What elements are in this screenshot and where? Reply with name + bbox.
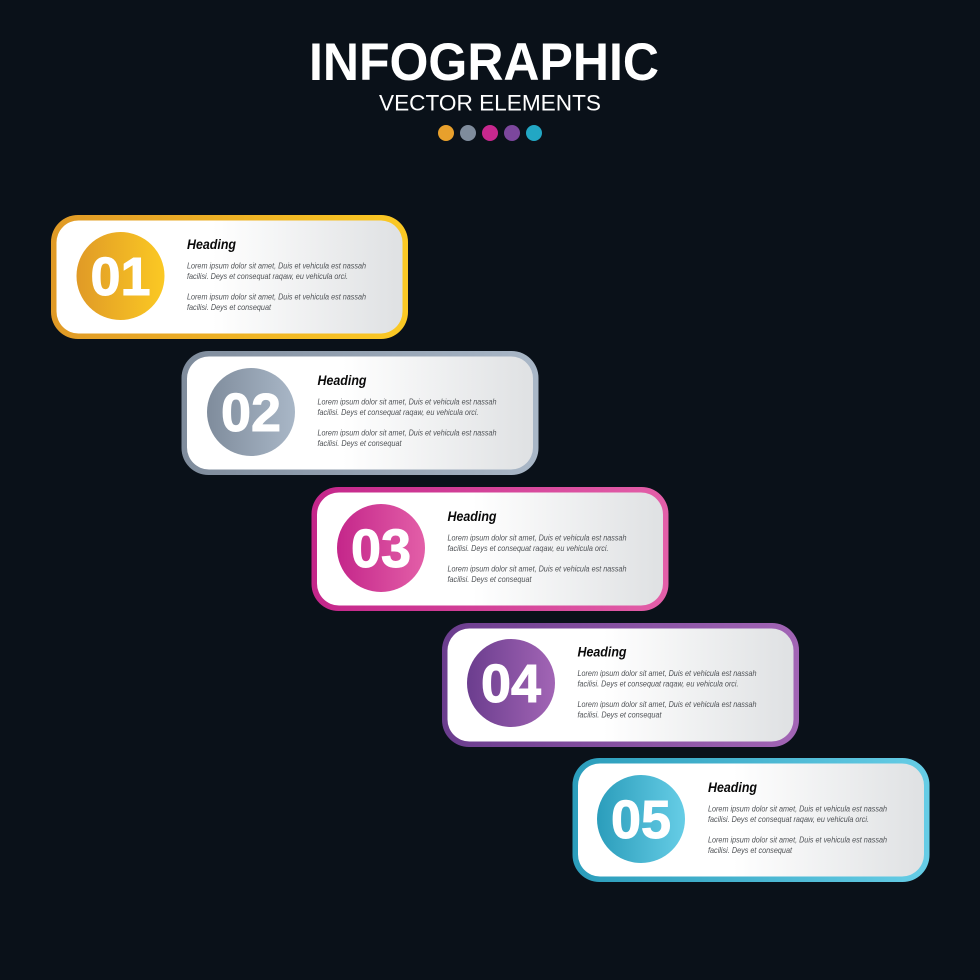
- body text 05: facilisi. Deys et consequat: [708, 846, 793, 855]
- panel: step 03: [312, 487, 668, 611]
- number badge 01: 01: [90, 247, 151, 307]
- body text 03: Lorem ipsum dolor sit amet, Duis et vehicula est nassah: [448, 564, 627, 573]
- number badge 03: [337, 504, 425, 592]
- body text 02: Lorem ipsum dolor sit amet, Duis et vehicula est nassah: [318, 428, 497, 437]
- body text 05: [708, 804, 887, 855]
- number badge 01: [76, 232, 164, 320]
- title: INFOGRAPHIC: [309, 33, 659, 92]
- body text 04: Lorem ipsum dolor sit amet, Duis et vehicula est nassah: [578, 669, 757, 678]
- colour dots: [438, 125, 542, 141]
- body text 03: facilisi. Deys et consequat raqaw, eu vehicula orci.: [448, 544, 608, 553]
- body text 04: [578, 669, 757, 720]
- heading 05: Heading: [708, 779, 757, 795]
- body text 03: Lorem ipsum dolor sit amet, Duis et vehicula est nassah: [448, 534, 627, 542]
- body text 05: facilisi. Deys et consequat raqaw, eu vehicula orci.: [708, 815, 869, 824]
- heading 01: Heading: [187, 236, 236, 252]
- panel: step 02: [182, 351, 538, 475]
- body text 01: Lorem ipsum dolor sit amet, Duis et vehicula est nassah: [187, 292, 366, 301]
- number badge 05: [597, 775, 685, 863]
- number badge 02: [207, 368, 295, 456]
- body text 02: Lorem ipsum dolor sit amet, Duis et vehicula est nassah: [318, 398, 497, 406]
- body text 05: Lorem ipsum dolor sit amet, Duis et vehicula est nassah: [708, 835, 887, 844]
- panel: step 01: [51, 215, 408, 339]
- number badge 02: 02: [221, 383, 281, 443]
- number badge 03: 03: [351, 519, 411, 579]
- body text 02: facilisi. Deys et consequat raqaw, eu vehicula orci.: [318, 408, 478, 417]
- body text 01: facilisi. Deys et consequat: [187, 303, 272, 312]
- body text 01: Lorem ipsum dolor sit amet, Duis et vehicula est nassah: [187, 262, 366, 270]
- body text 04: facilisi. Deys et consequat raqaw, eu vehicula orci.: [578, 680, 738, 688]
- body text 04: Lorem ipsum dolor sit amet, Duis et vehicula est nassah: [578, 700, 757, 709]
- subtitle: VECTOR ELEMENTS: [379, 90, 601, 116]
- panel: step 04: [442, 623, 799, 747]
- heading 04: Heading: [578, 644, 627, 660]
- number badge 04: 04: [481, 654, 541, 714]
- body text 05: Lorem ipsum dolor sit amet, Duis et vehicula est nassah: [708, 804, 887, 814]
- body text 01: facilisi. Deys et consequat raqaw, eu vehicula orci.: [187, 272, 348, 281]
- number badge 05: 05: [611, 790, 671, 850]
- body text 03: facilisi. Deys et consequat: [448, 575, 532, 584]
- heading 03: Heading: [448, 508, 497, 524]
- body text 04: facilisi. Deys et consequat: [578, 710, 662, 720]
- number badge 04: [467, 639, 555, 727]
- body text 03: [448, 534, 627, 584]
- body text 02: facilisi. Deys et consequat: [318, 439, 402, 448]
- body text 01: [187, 262, 366, 312]
- panel: step 05: [572, 758, 930, 882]
- body text 02: [318, 398, 497, 448]
- heading 02: Heading: [318, 372, 367, 388]
